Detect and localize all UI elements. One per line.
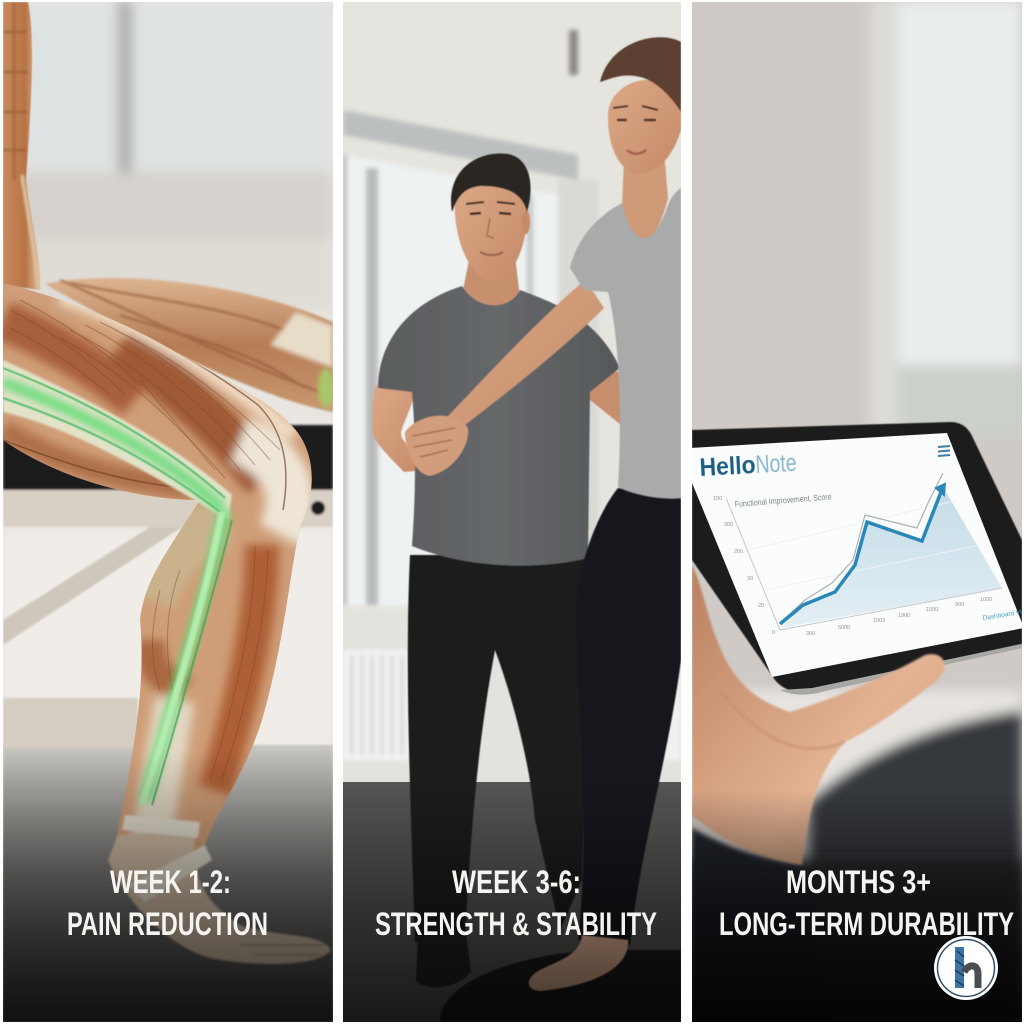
axis labels: 300 xyxy=(806,631,815,637)
dark sleeve xyxy=(692,828,830,1022)
patient t-shirt xyxy=(570,188,681,498)
patient foot xyxy=(529,935,628,991)
HelloNote logo: Note xyxy=(755,449,797,479)
HelloNote logo xyxy=(700,454,796,476)
axis labels: 100 xyxy=(713,496,722,502)
patient head xyxy=(608,80,681,173)
caption: week 1-2: PAIN REDUCTION xyxy=(67,906,268,942)
axis labels: 900 xyxy=(955,602,964,608)
therapist legs xyxy=(408,555,590,942)
treatment bench xyxy=(3,425,333,748)
caption: week 1-2 xyxy=(67,864,268,942)
HelloNote logo: Hello xyxy=(699,451,756,482)
torso muscles xyxy=(3,2,40,290)
holding hand xyxy=(692,565,945,865)
far leg muscles xyxy=(45,278,334,412)
caption: months 3+: MONTHS 3+ xyxy=(786,864,931,900)
clinic background xyxy=(3,0,333,1022)
therapist hair xyxy=(451,153,531,212)
balance pod xyxy=(440,950,681,1022)
panel: week 3-6 strength and stability xyxy=(343,2,681,1022)
caption: week 3-6: WEEK 3-6: xyxy=(452,864,581,900)
patient hair xyxy=(600,37,681,112)
therapist neck xyxy=(462,262,520,306)
tablet screen xyxy=(690,433,1024,677)
therapist t-shirt xyxy=(378,286,620,566)
brand badge xyxy=(934,936,998,1000)
line chart xyxy=(713,473,1024,637)
axis labels: 1000 xyxy=(980,597,992,603)
glowing green tendon highlight xyxy=(3,360,232,805)
axis labels: 1003 xyxy=(873,618,885,624)
h monogram xyxy=(955,947,978,988)
axis labels: 1900 xyxy=(898,613,910,619)
patient woman xyxy=(405,37,681,945)
tablet xyxy=(690,422,1024,695)
tablet frame xyxy=(692,422,1022,693)
foot and ankle xyxy=(108,815,331,964)
axis labels: 1000 xyxy=(926,607,938,613)
therapist arm right xyxy=(589,371,620,425)
axis labels: 200 xyxy=(734,549,743,555)
panel: months 3+ long-term durability xyxy=(690,0,1024,1022)
bottom dark gradient xyxy=(3,750,333,1022)
clasped hands xyxy=(405,416,468,476)
menu icon xyxy=(938,446,950,456)
therapist head xyxy=(454,185,527,266)
axis labels: 20 xyxy=(758,603,764,609)
office background xyxy=(692,0,1022,1022)
axis labels: 30 xyxy=(747,576,753,582)
gym room background xyxy=(343,2,681,1022)
patient neck xyxy=(622,160,668,239)
panel: week 1-2 pain reduction xyxy=(0,0,340,1022)
patient leggings xyxy=(576,488,681,945)
chart title: Functional Improvement, Score xyxy=(734,491,832,509)
leg muscle anatomy xyxy=(3,283,312,870)
axis labels: 0 xyxy=(772,630,775,636)
axis labels: 5000 xyxy=(838,625,850,631)
caption: week 3-6: STRENGTH & STABILITY xyxy=(375,906,657,942)
axis labels: 300 xyxy=(724,522,733,528)
therapist arm left xyxy=(372,385,425,472)
bottom dark gradient xyxy=(692,790,1022,1022)
therapist shoe xyxy=(416,933,471,988)
axis labels xyxy=(713,496,992,637)
bottom dark gradient xyxy=(343,810,681,1022)
caption: months 3+ xyxy=(719,864,1014,942)
therapist face xyxy=(466,202,515,255)
patient arm xyxy=(448,280,604,426)
caption: week 1-2: WEEK 1-2: xyxy=(110,864,231,900)
patient face xyxy=(613,106,658,154)
caption: week 3-6 xyxy=(375,864,657,942)
therapist xyxy=(372,153,624,988)
